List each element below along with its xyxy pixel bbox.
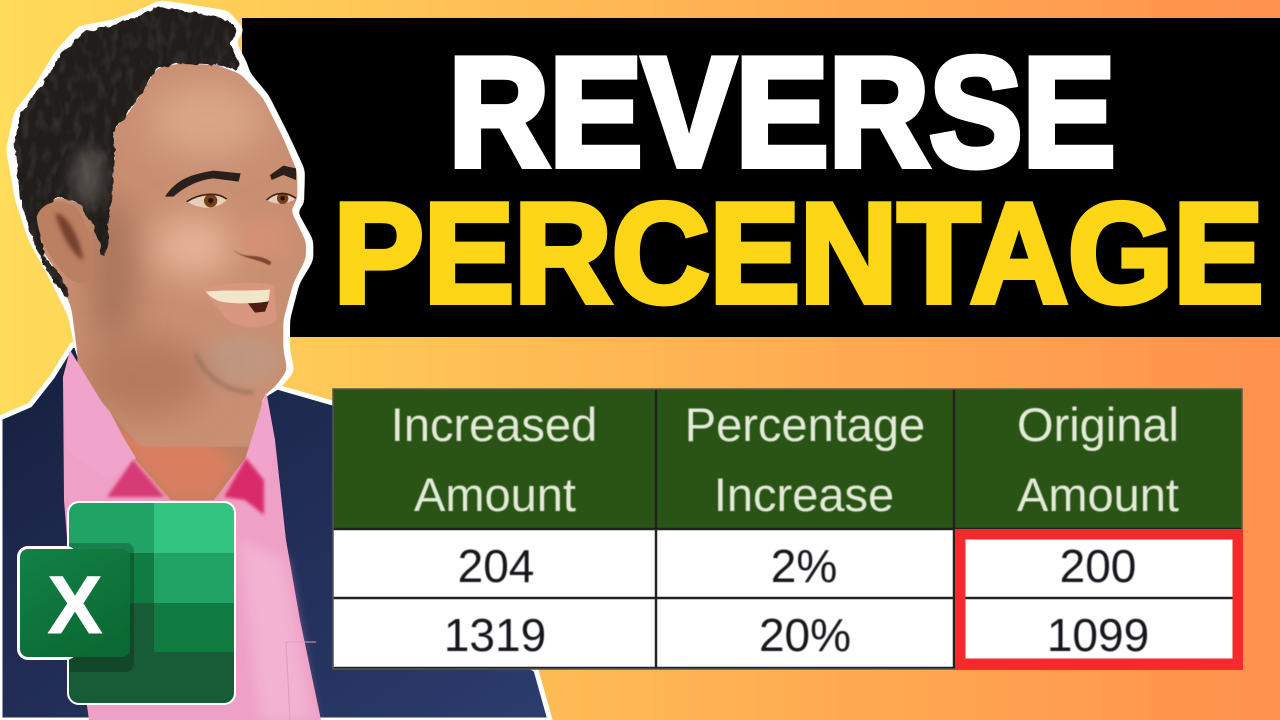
row 1 values: 200 (1060, 540, 1136, 592)
header: Increased Amount: Amount (414, 468, 576, 521)
head and face (6, 0, 313, 447)
cheek highlight (153, 217, 233, 277)
right eyebrow (270, 166, 296, 180)
header: Increased Amount: Increased (391, 398, 597, 451)
header: Original Amount: Amount (1017, 468, 1179, 521)
row 2 values: 1319 (444, 609, 546, 661)
Excel X badge: X (48, 560, 102, 651)
Excel logo icon (17, 501, 236, 705)
header: Percentage Increase: Percentage (685, 398, 925, 451)
collar flap right (224, 458, 264, 515)
header: Percentage Increase: Increase (714, 468, 894, 521)
row 1 values: 2% (771, 540, 837, 592)
jaw line (195, 353, 253, 393)
neck warm shading (115, 430, 236, 500)
Excel X badge (17, 546, 130, 660)
right eye (267, 193, 296, 204)
teeth (206, 289, 270, 303)
collar right (245, 392, 275, 500)
header: Original Amount: Original (1017, 398, 1179, 451)
collar flap left (107, 460, 164, 497)
title line: PERCENTAGE: PERCENTAGE (334, 174, 1264, 333)
skin (33, 60, 310, 447)
row 2 values (444, 609, 1149, 661)
sheet outline (67, 501, 236, 705)
left eyebrow (165, 171, 241, 197)
data table (333, 389, 1242, 669)
neck shade (80, 337, 207, 417)
header: Increased Amount (391, 398, 597, 521)
mouth interior (247, 300, 269, 313)
table cell text (391, 398, 1179, 661)
row 2 values: 1099 (1047, 609, 1149, 661)
title line: REVERSE: REVERSE (448, 26, 1116, 198)
header: Percentage Increase (685, 398, 925, 521)
forehead highlight (150, 83, 263, 157)
collar left (63, 350, 136, 480)
red highlight box (960, 534, 1238, 664)
presenter portrait (0, 0, 550, 720)
badge shadow (69, 543, 134, 672)
shirt pocket (286, 642, 316, 720)
table header background (333, 389, 1242, 529)
row 1 values: 204 (458, 540, 534, 592)
header: Original Amount (1017, 398, 1179, 521)
grey temple hair (73, 147, 103, 207)
ear (37, 201, 95, 283)
jacket (0, 345, 550, 720)
lips (203, 283, 277, 327)
white cut-out outline (6, 0, 313, 433)
inner ear (55, 213, 83, 260)
left eye (187, 194, 227, 208)
title banner (242, 18, 1280, 337)
temple and side shadow (90, 193, 137, 353)
sheet cells (69, 503, 234, 703)
nose (232, 218, 288, 265)
shirt light side (240, 540, 312, 720)
table body background (333, 529, 1242, 669)
stubble chin (206, 337, 278, 383)
hair (15, 7, 241, 312)
neck (77, 300, 266, 500)
row 2 values: 20% (759, 609, 851, 661)
row 1 values (458, 540, 1136, 592)
pink shirt (63, 377, 321, 720)
